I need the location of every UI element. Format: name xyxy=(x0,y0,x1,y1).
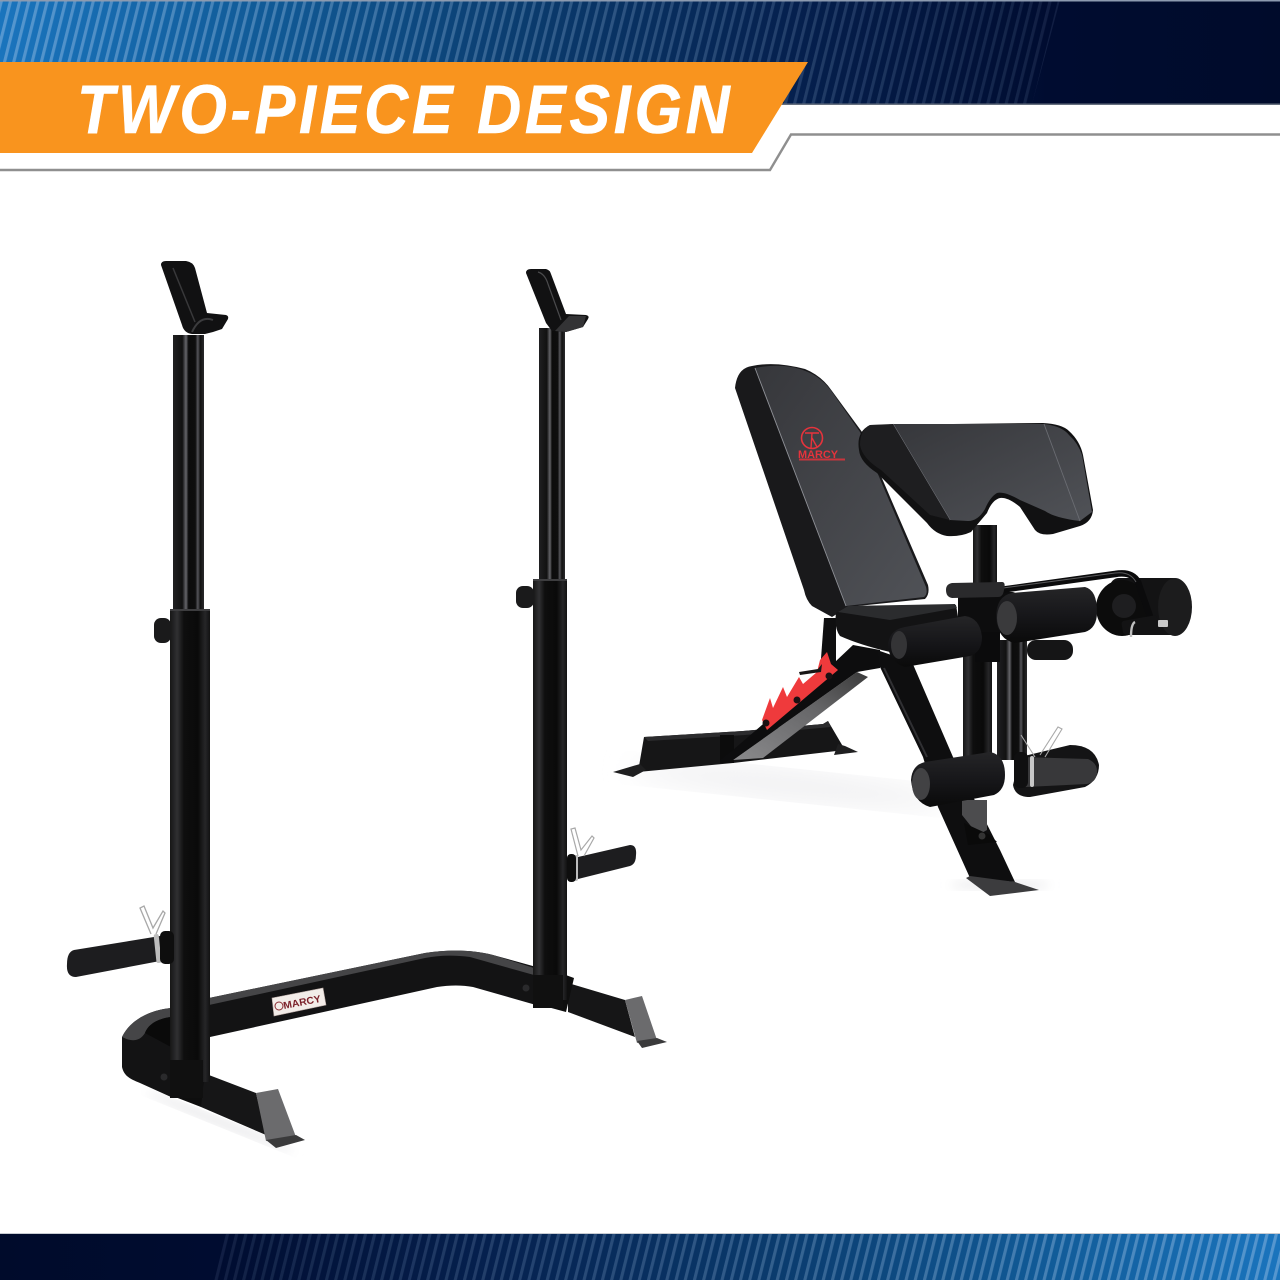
left foot xyxy=(160,1064,305,1148)
left weight peg xyxy=(67,906,174,977)
developer arm tube xyxy=(958,573,1168,637)
front upper roller xyxy=(996,587,1097,643)
leg developer upper rollers xyxy=(888,573,1192,667)
arm curl pad xyxy=(858,423,1093,536)
MARCY badge xyxy=(272,988,326,1016)
rear upper roller xyxy=(1096,578,1192,636)
right foot xyxy=(522,970,667,1048)
padded handle xyxy=(946,582,1005,598)
red adjuster plate xyxy=(762,652,838,730)
footer band xyxy=(0,1233,1280,1280)
incline strut xyxy=(720,645,880,760)
left upright xyxy=(154,335,210,1098)
left bar catch xyxy=(161,261,228,334)
title banner xyxy=(0,62,1280,172)
arm pad post xyxy=(973,525,997,595)
title text: TWO-PIECE DESIGN xyxy=(77,71,733,148)
squat rack xyxy=(67,261,667,1148)
floor shadows xyxy=(144,754,1050,1156)
backrest xyxy=(735,364,929,617)
header band xyxy=(0,0,1280,105)
adjustable bench xyxy=(613,364,1192,896)
rack base frame xyxy=(122,951,540,1097)
seat roller xyxy=(888,616,982,667)
vertical posts xyxy=(963,600,1073,760)
front lower roller xyxy=(911,752,1005,807)
rear base foot xyxy=(613,721,858,777)
front leg xyxy=(877,650,1039,896)
backrest logo xyxy=(798,428,845,461)
rear lower roller xyxy=(1013,727,1099,797)
MARCY badge: MARCY xyxy=(282,994,322,1012)
lower rollers xyxy=(911,727,1099,807)
right bar catch xyxy=(526,269,589,332)
seat xyxy=(836,604,962,652)
seat upright xyxy=(820,618,836,672)
right weight peg xyxy=(567,828,636,882)
right upright xyxy=(516,328,567,1008)
backrest logo: MARCY xyxy=(798,449,839,461)
